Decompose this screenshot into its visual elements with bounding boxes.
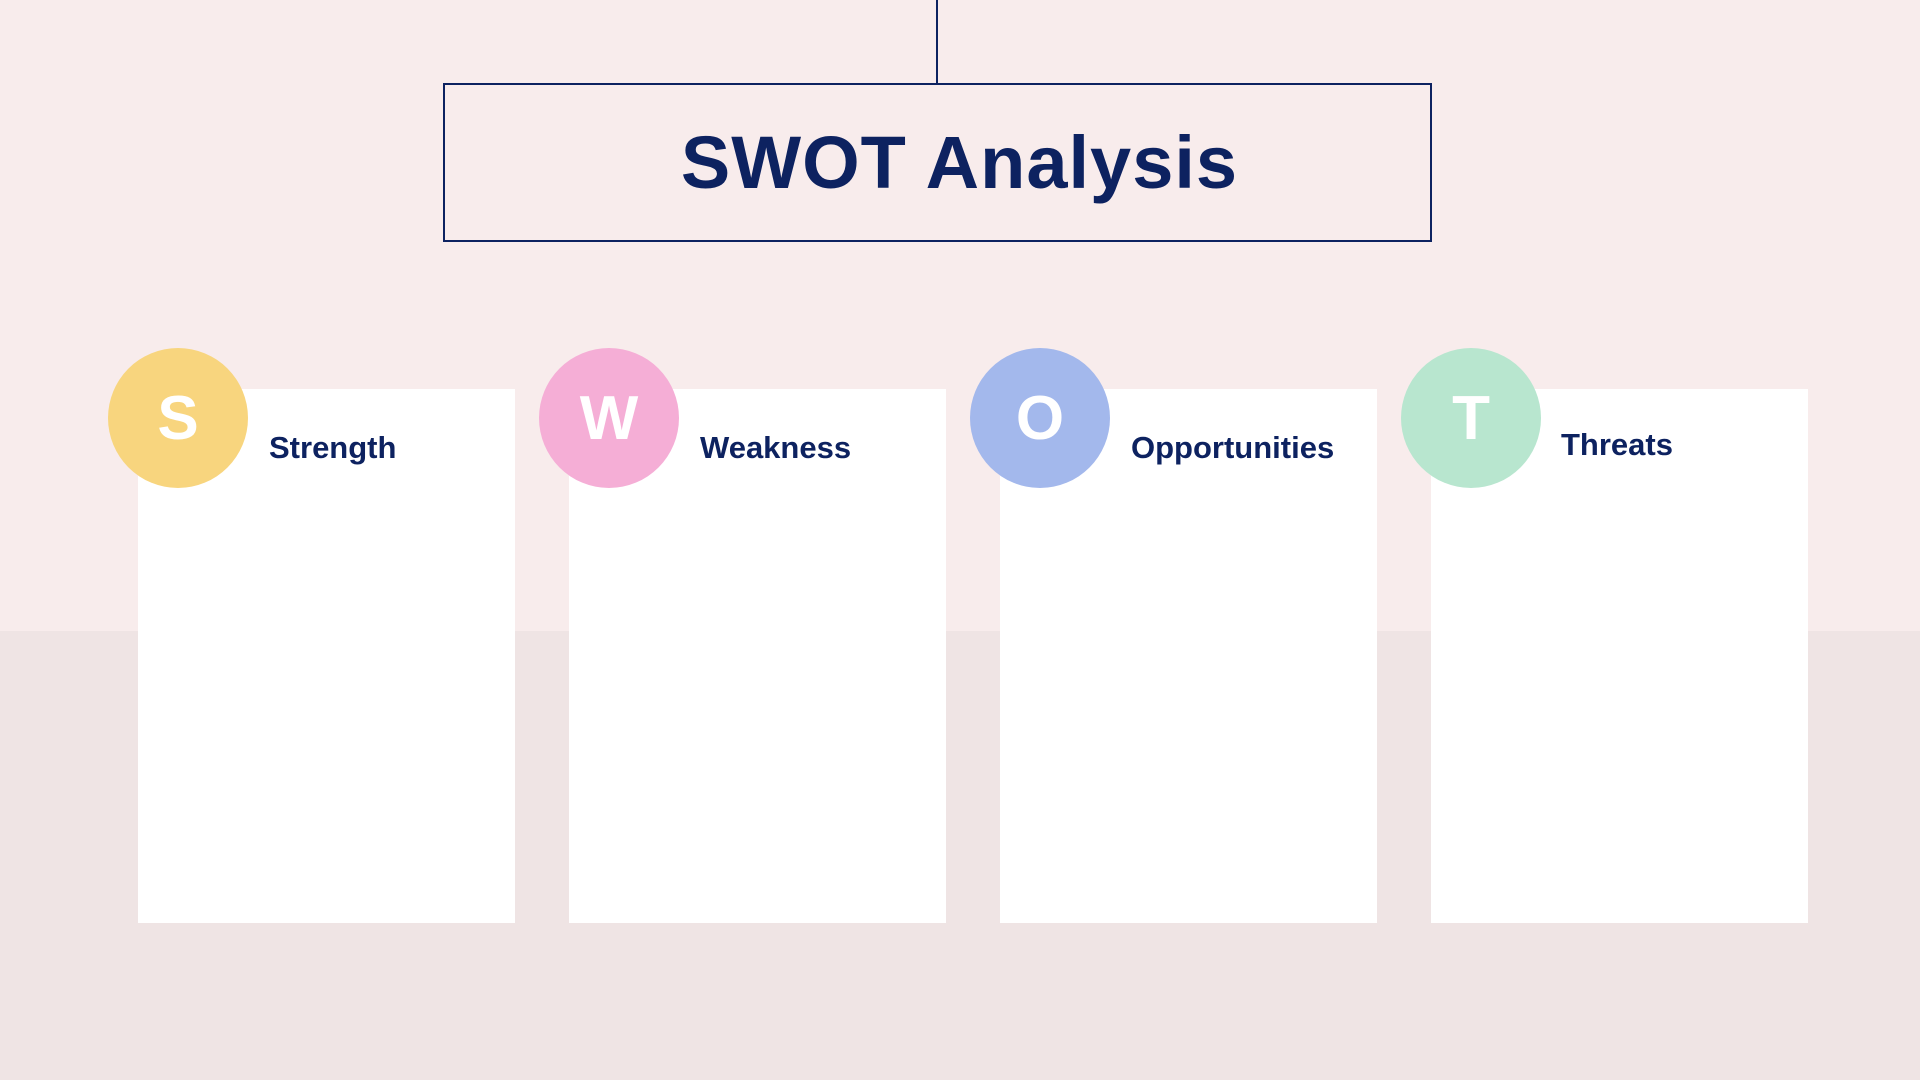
icon: T circle: T [1452, 384, 1490, 452]
panel: weakness [569, 389, 946, 923]
heading: Strength: Strength [269, 430, 396, 465]
icon: W circle [539, 348, 679, 488]
title [443, 83, 1432, 242]
heading: Threats: Threats [1561, 427, 1673, 462]
icon: O circle [970, 348, 1110, 488]
icon: W circle: W [580, 384, 638, 452]
connector line [936, 0, 938, 84]
panel: opportunities [1000, 389, 1377, 923]
icon: T circle [1401, 348, 1541, 488]
icon: O circle: O [1016, 384, 1064, 452]
title: SWOT Analysis [681, 121, 1238, 204]
panel: threats [1431, 389, 1808, 923]
icon: S circle: S [157, 384, 199, 452]
heading: Weakness: Weakness [700, 430, 851, 465]
icon: S circle [108, 348, 248, 488]
panel: strength [138, 389, 515, 923]
heading: Opportunities: Opportunities [1131, 430, 1334, 465]
